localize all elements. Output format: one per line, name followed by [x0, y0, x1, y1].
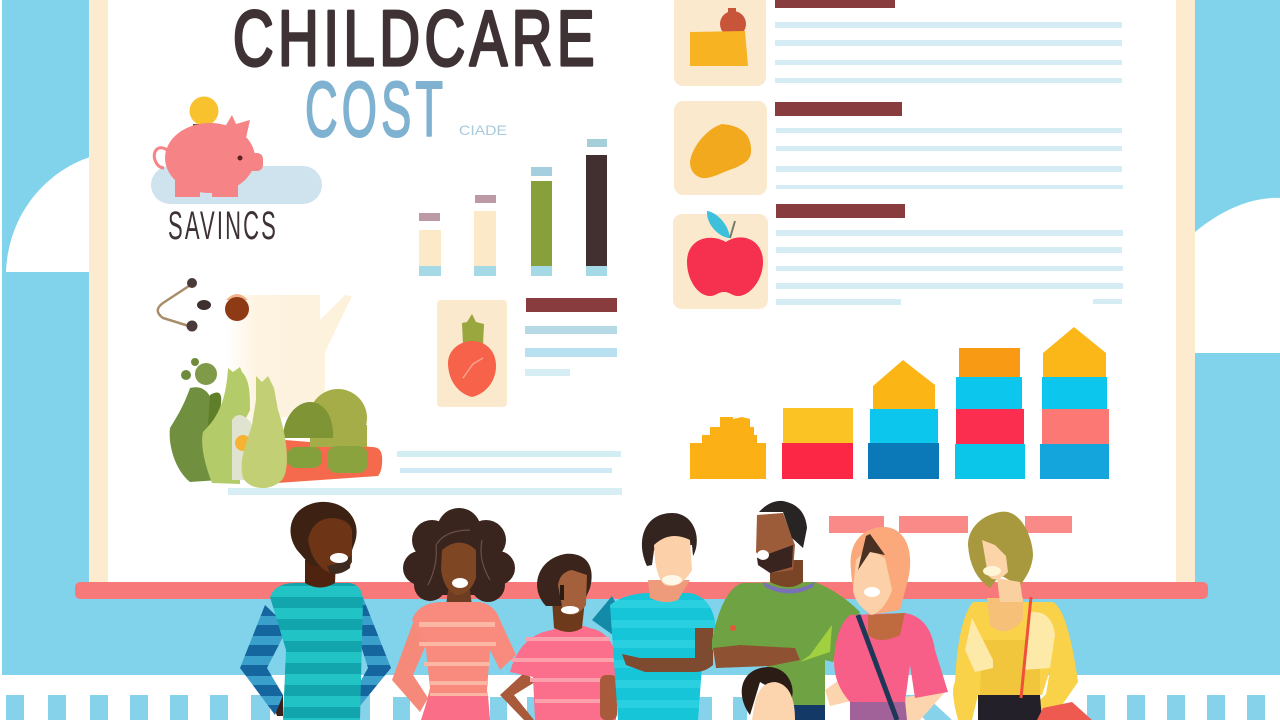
person 2: woman with curly hair	[392, 508, 516, 720]
vegetables	[170, 358, 382, 488]
small caption: CIADE	[459, 122, 507, 138]
text block 2	[775, 102, 1123, 189]
cream pitcher	[225, 295, 352, 425]
text block 1	[775, 0, 1122, 83]
person 7: woman in yellow cardigan with red bag	[953, 512, 1092, 720]
card: cheese	[674, 0, 766, 86]
bar chart	[419, 139, 607, 276]
board frame	[89, 0, 1195, 590]
pink legend labels	[829, 516, 1072, 533]
shelf rail	[75, 582, 1208, 599]
person 5: bearded man in green shirt	[712, 501, 860, 720]
savings label: SAVINCS	[168, 203, 276, 248]
person 1: man in teal striped sweater	[240, 502, 391, 720]
block stack chart	[690, 327, 1109, 479]
text lines: lower left	[228, 451, 622, 495]
text block 3	[776, 204, 1123, 305]
person 6: woman in pink with crossbody bag	[825, 527, 948, 720]
card: tomato	[437, 300, 507, 407]
small child	[742, 667, 795, 720]
icon: stethoscope	[158, 278, 249, 332]
person 4: man in cyan shirt	[592, 513, 716, 720]
subtitle: cost: COST	[305, 65, 443, 153]
text lines: tomato card	[525, 298, 617, 376]
card: nugget	[674, 101, 767, 195]
fence	[0, 675, 1280, 720]
card: apple	[673, 211, 768, 309]
icon: piggy bank	[151, 96, 322, 204]
person 3: boy in pink shirt	[500, 554, 617, 720]
